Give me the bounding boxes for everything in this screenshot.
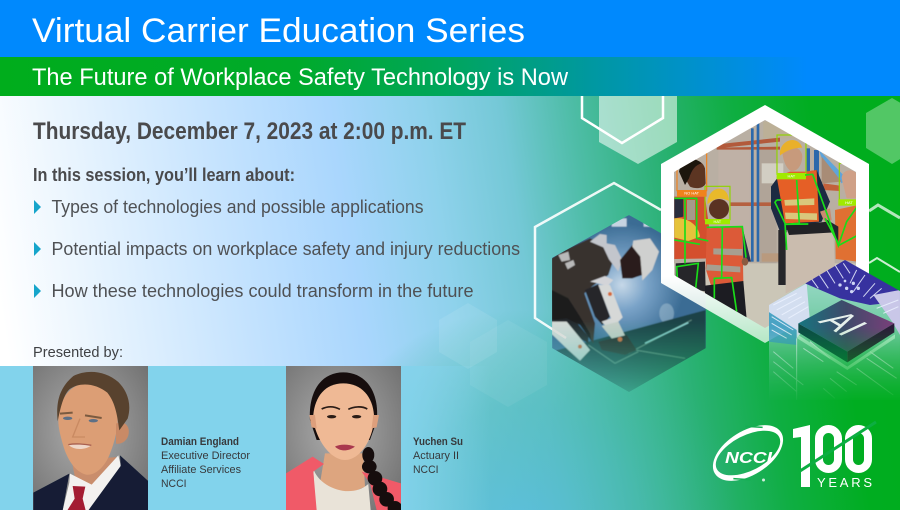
- white hexagon frame: [661, 105, 869, 343]
- text: Yuchen Su credentials: Yuchen Su: [413, 436, 463, 448]
- photo: AI microchip on circuit board: [767, 255, 900, 402]
- detection boxes: [677, 135, 859, 220]
- logo: 100 years anniversary mark: [793, 422, 876, 490]
- worker right: [771, 140, 830, 285]
- header: green subtitle bar: [0, 57, 900, 96]
- text: Damian England credentials: Damian England: [161, 436, 239, 448]
- text: Damian England credentials: [161, 436, 250, 490]
- bullet text 1: Types of technologies and possible applications: [52, 197, 424, 217]
- portrait: Yuchen Su: [286, 366, 402, 510]
- icon: bullet arrow 1: [34, 200, 41, 214]
- text: Damian England credentials: NCCI: [161, 478, 186, 490]
- detection labels: HAT: [845, 200, 853, 205]
- text: Yuchen Su credentials: NCCI: [413, 464, 438, 476]
- outline hexagon around exoskeleton photo: [535, 183, 661, 338]
- title: Virtual Carrier Education Series: [32, 12, 525, 50]
- decorative hexagons: [439, 96, 900, 407]
- detection labels: HAT: [787, 174, 796, 179]
- copier cabinet: [786, 222, 835, 293]
- chip label: AI: [809, 306, 878, 341]
- bullet text 2: Potential impacts on workplace safety and injury reductions: [52, 239, 520, 259]
- icon: bullet arrow 3: [34, 284, 41, 298]
- presented by label: Presented by:: [33, 344, 123, 361]
- text: Yuchen Su credentials: Actuary II: [413, 450, 459, 462]
- subtitle: The Future of Workplace Safety Technology is Now: [32, 64, 569, 91]
- worker left: [674, 160, 710, 292]
- logo: NCCI swoosh: [702, 412, 794, 494]
- bullet list: [34, 197, 520, 301]
- text: Damian England credentials: Affiliate Services: [161, 464, 241, 476]
- pose skeleton lines: [674, 174, 858, 312]
- text: Yuchen Su credentials: [413, 436, 463, 476]
- portrait: Damian England: [33, 366, 149, 510]
- header: blue title bar: [0, 0, 900, 57]
- text: Damian England credentials: Executive Director: [161, 450, 250, 462]
- icon: bullet arrow 2: [34, 242, 41, 256]
- session intro heading: In this session, you’ll learn about:: [33, 165, 295, 185]
- worker centre: [705, 189, 751, 319]
- detection labels: NO HAT: [684, 191, 700, 196]
- years label: YEARS: [817, 475, 872, 490]
- detection labels: HAT: [713, 219, 722, 224]
- bullet text 3: How these technologies could transform in the future: [52, 281, 474, 301]
- logo wordmark: NCCI: [725, 450, 773, 467]
- detection labels: [677, 173, 859, 224]
- photo: warehouse workers with AI detection overlay: [672, 118, 859, 332]
- lower presenter band: [0, 310, 740, 510]
- worker far right: [820, 170, 858, 262]
- photo: worker in exoskeleton: [552, 215, 706, 397]
- date heading: Thursday, December 7, 2023 at 2:00 p.m. ET: [33, 118, 466, 145]
